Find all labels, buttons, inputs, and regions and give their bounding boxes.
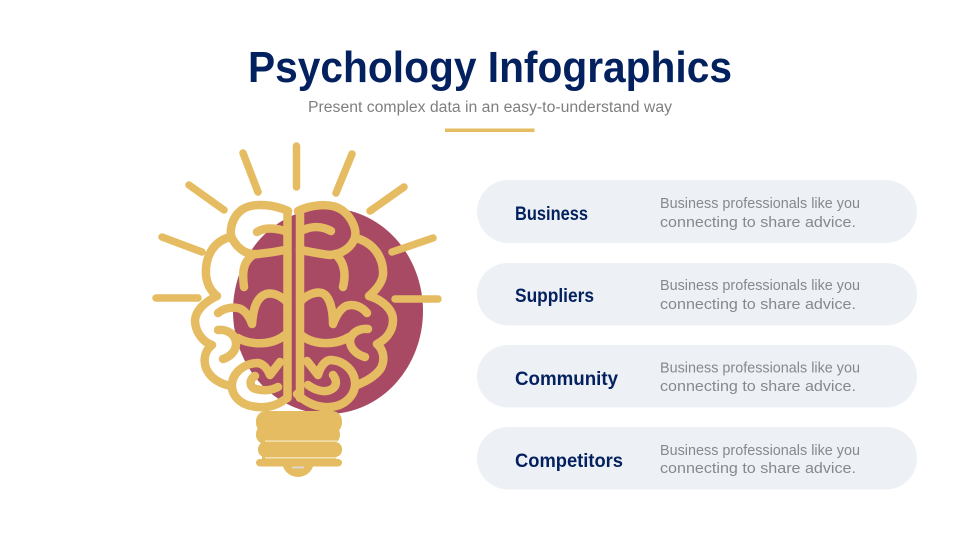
row: Community: Business professionals like you — [660, 360, 860, 376]
row: Suppliers: Business professionals like you — [660, 278, 860, 294]
subtitle: Present complex data in an easy-to-understand way — [308, 99, 672, 116]
brain outline — [195, 205, 393, 407]
title underline — [445, 128, 534, 132]
row: Business: connecting to share advice. — [660, 215, 856, 231]
row: Competitors: Competitors — [515, 451, 623, 472]
light rays — [156, 146, 438, 299]
title: Psychology Infographics — [248, 43, 732, 92]
illustration: brain light bulb — [156, 146, 438, 477]
row: Business: Business — [515, 204, 588, 225]
bulb base — [256, 411, 342, 477]
row: Suppliers — [477, 263, 917, 326]
background circle — [233, 208, 423, 414]
row: Community: connecting to share advice. — [660, 379, 856, 395]
row: Community: Community — [515, 369, 618, 390]
row: Suppliers: Suppliers — [515, 286, 594, 307]
row: Competitors: Business professionals like you — [660, 443, 860, 459]
row: Community — [477, 345, 917, 408]
row: Business: Business professionals like you — [660, 196, 860, 212]
row: Business — [477, 180, 917, 243]
row: Competitors: connecting to share advice. — [660, 461, 856, 477]
row: Suppliers: connecting to share advice. — [660, 297, 856, 313]
row: Competitors — [477, 427, 917, 490]
